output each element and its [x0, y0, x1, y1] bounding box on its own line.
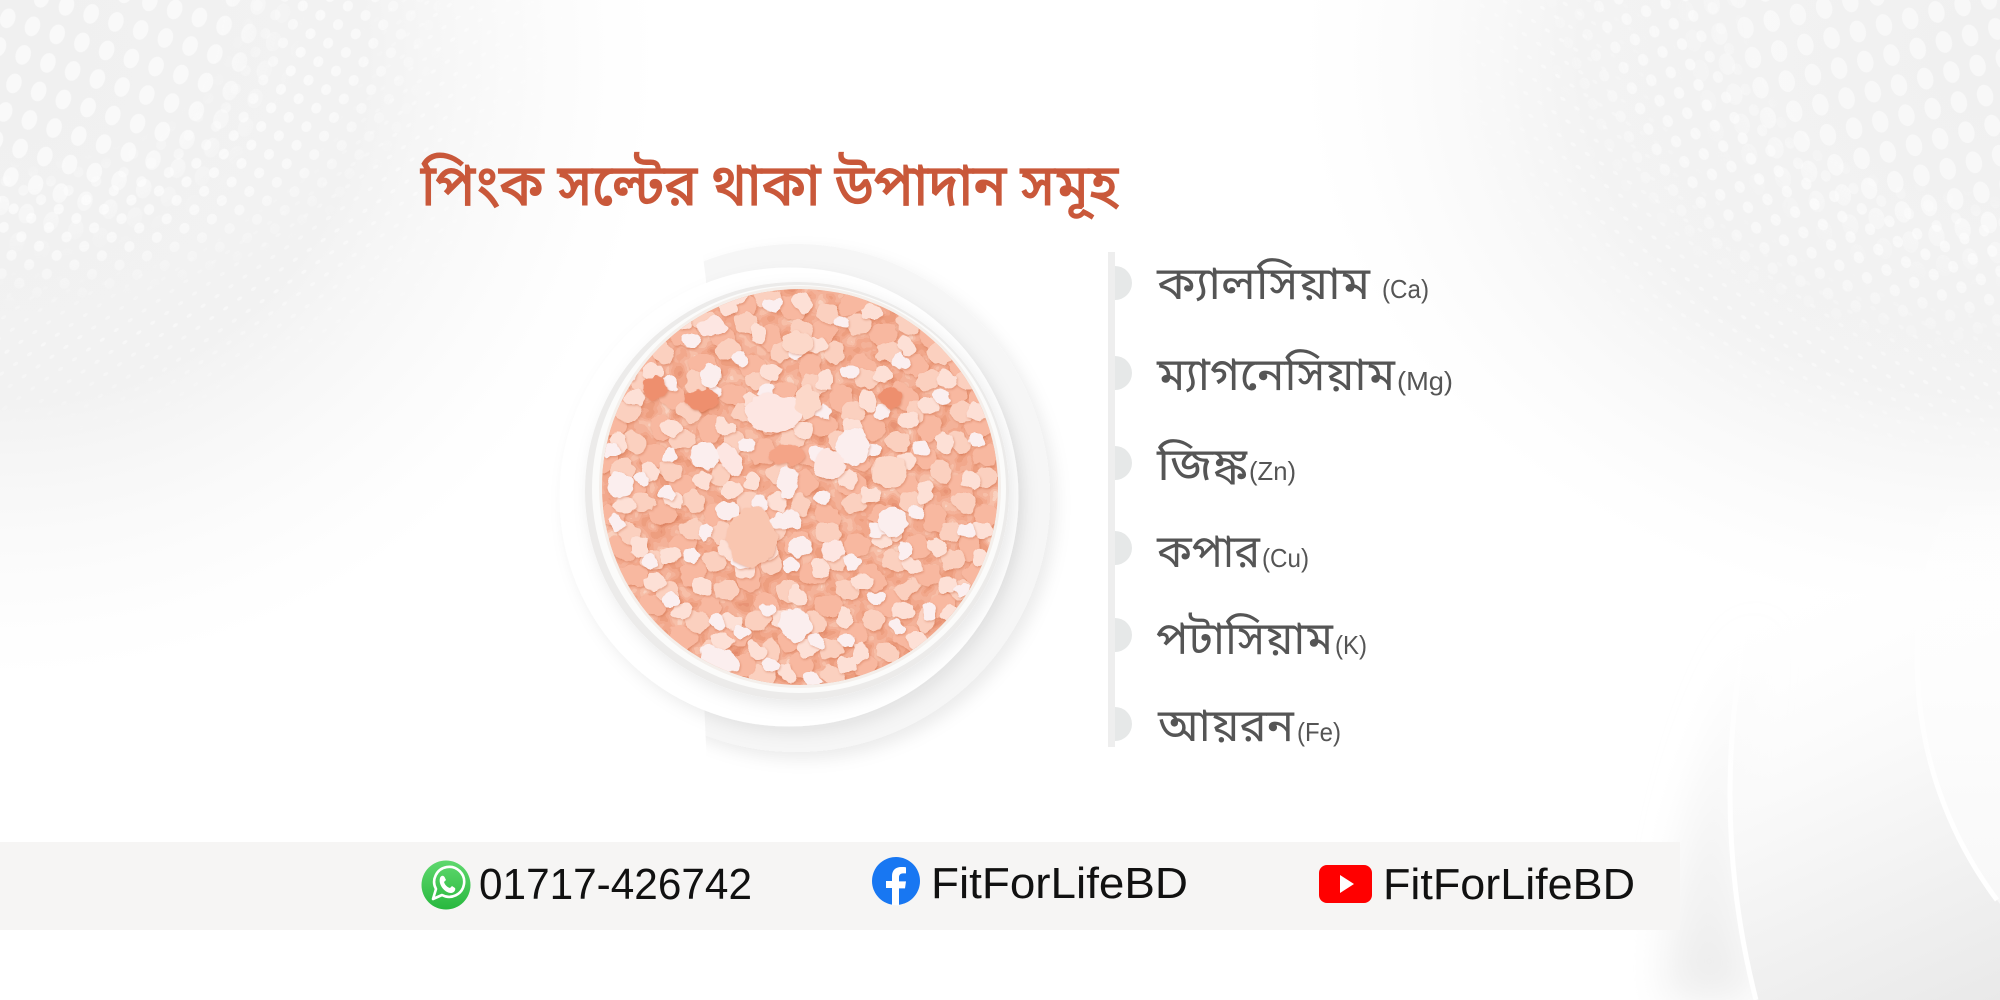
item: magnesium: ম্যাগনেসিয়াম [1156, 347, 1396, 409]
item: iron [1115, 699, 1341, 760]
contact: whatsapp: 01717-426742 [479, 860, 752, 909]
element list [1115, 256, 1453, 760]
title: পিংক সল্টের থাকা উপাদান সমূহ [420, 152, 1119, 229]
item: calcium: (Ca) [1382, 274, 1429, 304]
contact: facebook: FitForLifeBD [931, 859, 1188, 908]
salt crystals [600, 287, 1000, 687]
item: iron: আয়রন [1157, 699, 1295, 760]
icon: facebook [872, 857, 920, 905]
item: calcium [1115, 256, 1429, 318]
decorative curves bottom right [1668, 480, 2000, 1000]
white bowl [585, 282, 1009, 700]
item: magnesium: (Mg) [1397, 366, 1453, 396]
bowl inner wall [592, 285, 1006, 693]
item: copper: কপার [1156, 525, 1261, 586]
item: zinc: জিঙ্ক [1156, 437, 1248, 499]
icon: whatsapp [422, 860, 470, 910]
background [0, 0, 2000, 482]
contact: youtube: FitForLifeBD [1383, 860, 1635, 909]
vertical list rule [1108, 252, 1115, 747]
item: zinc [1115, 437, 1296, 499]
item: iron: (Fe) [1297, 717, 1341, 747]
item: copper [1115, 525, 1309, 586]
item: calcium: ক্যালসিয়াম [1156, 256, 1371, 318]
item: potassium: (K) [1335, 630, 1367, 660]
icon: youtube [1319, 865, 1372, 903]
outer ring [704, 244, 1058, 760]
item: potassium: পটাসিয়াম [1156, 611, 1334, 673]
white backing disc [560, 268, 1018, 726]
item: zinc: (Zn) [1249, 456, 1296, 486]
bowl of pink salt [542, 244, 1050, 752]
footer band [0, 842, 1680, 930]
item: copper: (Cu) [1262, 543, 1309, 573]
item: magnesium [1115, 347, 1453, 409]
